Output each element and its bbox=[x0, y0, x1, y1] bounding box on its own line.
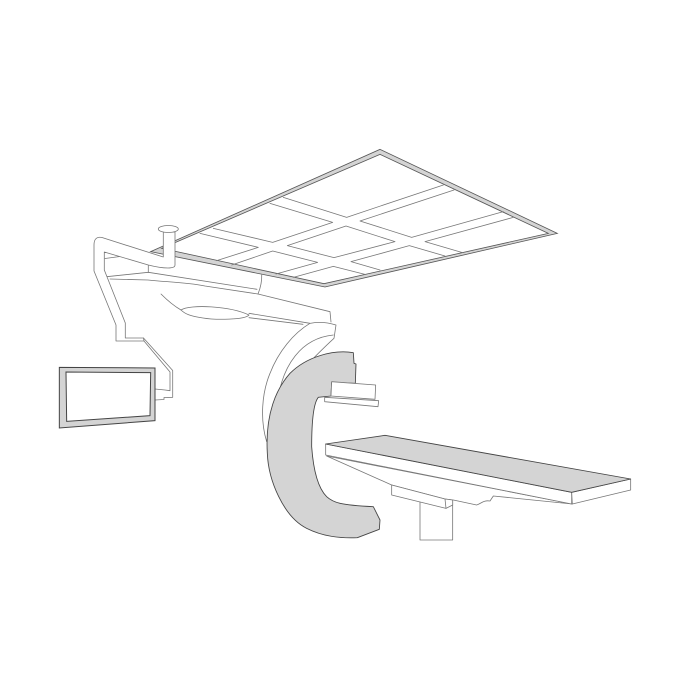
C-arm upper sleeve bbox=[263, 323, 336, 442]
detector block bbox=[325, 382, 379, 407]
table side bbox=[326, 444, 572, 504]
table base plate bbox=[392, 485, 453, 508]
table end bbox=[572, 479, 631, 504]
ceiling panel bbox=[151, 149, 557, 287]
C-arm bbox=[263, 323, 380, 538]
monitor bbox=[59, 367, 155, 428]
boom beam with dome light bbox=[105, 256, 331, 324]
table underside bbox=[327, 456, 572, 505]
ceiling grid tiles bbox=[200, 185, 513, 277]
C-arm body bbox=[267, 352, 380, 538]
table pedestal bbox=[420, 500, 453, 540]
table top bbox=[326, 435, 631, 492]
monitor bezel and screen bbox=[59, 367, 155, 428]
patient table bbox=[326, 435, 631, 540]
arm and ceiling mount post bbox=[94, 226, 178, 341]
monitor boom arm bbox=[94, 226, 331, 400]
monitor bracket bbox=[144, 338, 173, 400]
ceiling frame bbox=[151, 149, 557, 287]
